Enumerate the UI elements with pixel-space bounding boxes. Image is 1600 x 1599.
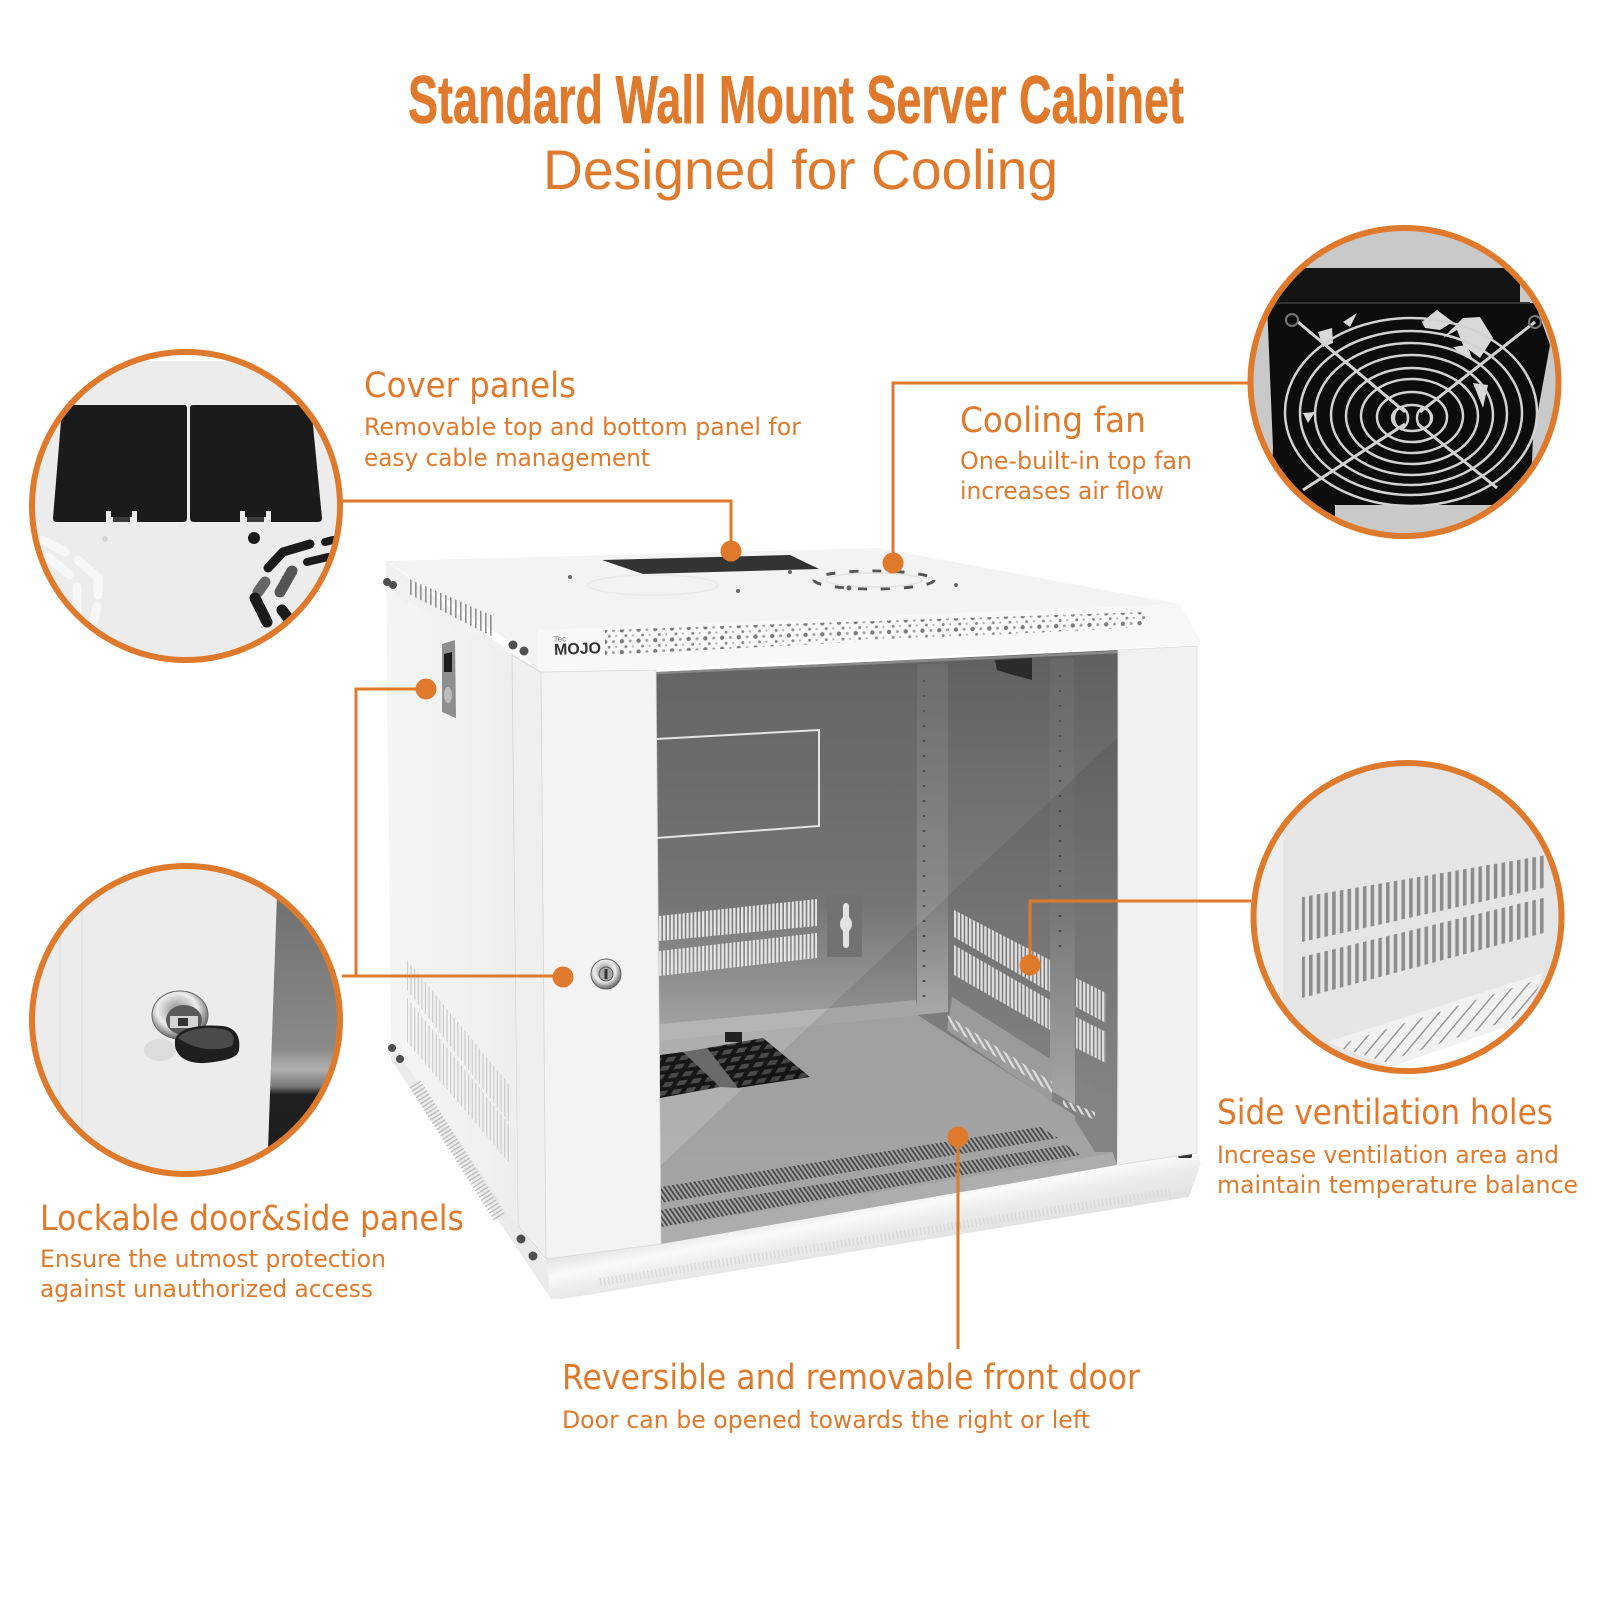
connector: side ventilation holes [1020,901,1251,976]
floor black grid panels [660,1032,810,1098]
cabinet base [546,1152,1201,1299]
cabinet top face [386,548,1200,673]
ventilation slots [1302,855,1547,998]
title: Designed for Cooling [543,138,1058,201]
dark glass section [268,899,337,1147]
label: lockable door and side panels: Lockable door&side panels [40,1199,464,1239]
back wall cutout outline [656,730,819,838]
callout circle: door lock and key [29,864,345,1180]
top fan ring [588,571,934,595]
label: cover panels: Removable top and bottom panel for [364,413,801,441]
fan housing [1267,268,1550,520]
label: side ventilation holes: Side ventilation holes [1217,1093,1553,1133]
glass reflection [659,736,1119,1250]
keyhole mount [827,903,862,957]
label: cover panels: easy cable management [364,444,650,472]
fan guard wire [1285,314,1541,506]
back wall ledge [650,1000,918,1042]
brand logo: Tec [554,634,566,644]
floor [650,1014,1113,1250]
cabinet front brow with perforation [538,604,1200,673]
connector: cooling fan [882,383,1249,574]
lock cylinder [152,991,208,1039]
label: cooling fan: Cooling fan [960,401,1146,441]
side ventilation slots [407,960,511,1165]
black fan slots [255,540,333,622]
glass top edge [656,652,1119,673]
door hinge strip [512,655,546,1259]
connector: lockable door and side panels [342,678,574,988]
right rack post [1050,933,1075,1105]
floor vents [660,1127,1080,1227]
callout circle: side ventilation holes [1251,760,1570,1080]
label: cover panels [364,366,801,472]
fan blades [1303,310,1493,423]
door right frame [1118,646,1197,1165]
right wall lower rail [947,997,1052,1102]
connector: front door [948,1126,968,1349]
left rack post [917,663,948,1015]
brand logo: MOJO [554,640,601,659]
label: lockable door and side panels: against unauthorized access [40,1275,373,1303]
side panel latch [442,640,456,718]
label: lockable door and side panels [40,1199,464,1303]
door lock [591,959,621,989]
label: reversible front door [562,1358,1141,1434]
top bracket [995,658,1032,680]
back wall vents [659,899,817,976]
screw holes [102,532,260,544]
server cabinet product illustration [383,548,1201,1299]
label: side ventilation holes: Increase ventilation area and [1217,1141,1559,1169]
right wall vents [954,910,1106,1063]
label: cooling fan [960,401,1192,505]
top cover panel [602,555,819,574]
title [408,62,1184,201]
rack hole marks [924,675,1060,1000]
label: reversible front door: Reversible and removable front door [562,1358,1141,1398]
label: side ventilation holes [1217,1093,1578,1199]
right wall corner bracket [1075,1116,1113,1152]
callout circle: cooling fan [1248,226,1562,540]
connector: cover panels [341,501,742,562]
cabinet screws [383,578,538,1260]
back wall [650,655,920,1060]
glass door interior [650,645,1125,1250]
label: cover panels: Cover panels [364,366,576,406]
side panel [386,585,517,1226]
label: side ventilation holes: maintain temperature balance [1217,1171,1578,1199]
side bottom bevel [391,1042,551,1299]
label: reversible front door: Door can be opened towards the right or left [562,1406,1090,1434]
title: Standard Wall Mount Server Cabinet [408,62,1184,138]
right wall [916,645,1125,1170]
door edge lines [60,900,82,1130]
embossed shapes [43,540,98,627]
key shadow [144,1039,176,1061]
black cover plates [53,405,322,524]
label: cooling fan: increases air flow [960,477,1164,505]
door left frame [541,670,661,1259]
key head [175,1026,239,1063]
label: cooling fan: One-built-in top fan [960,447,1192,475]
lower bevel slots [1327,973,1570,1080]
floor sill [790,1154,1117,1208]
callout circle: cover panels [29,349,343,663]
label: lockable door and side panels: Ensure the utmost protection [40,1245,386,1273]
top screws [568,570,958,593]
right wall diagonal slots [947,1015,1095,1120]
side top bevel with slots [386,561,538,672]
